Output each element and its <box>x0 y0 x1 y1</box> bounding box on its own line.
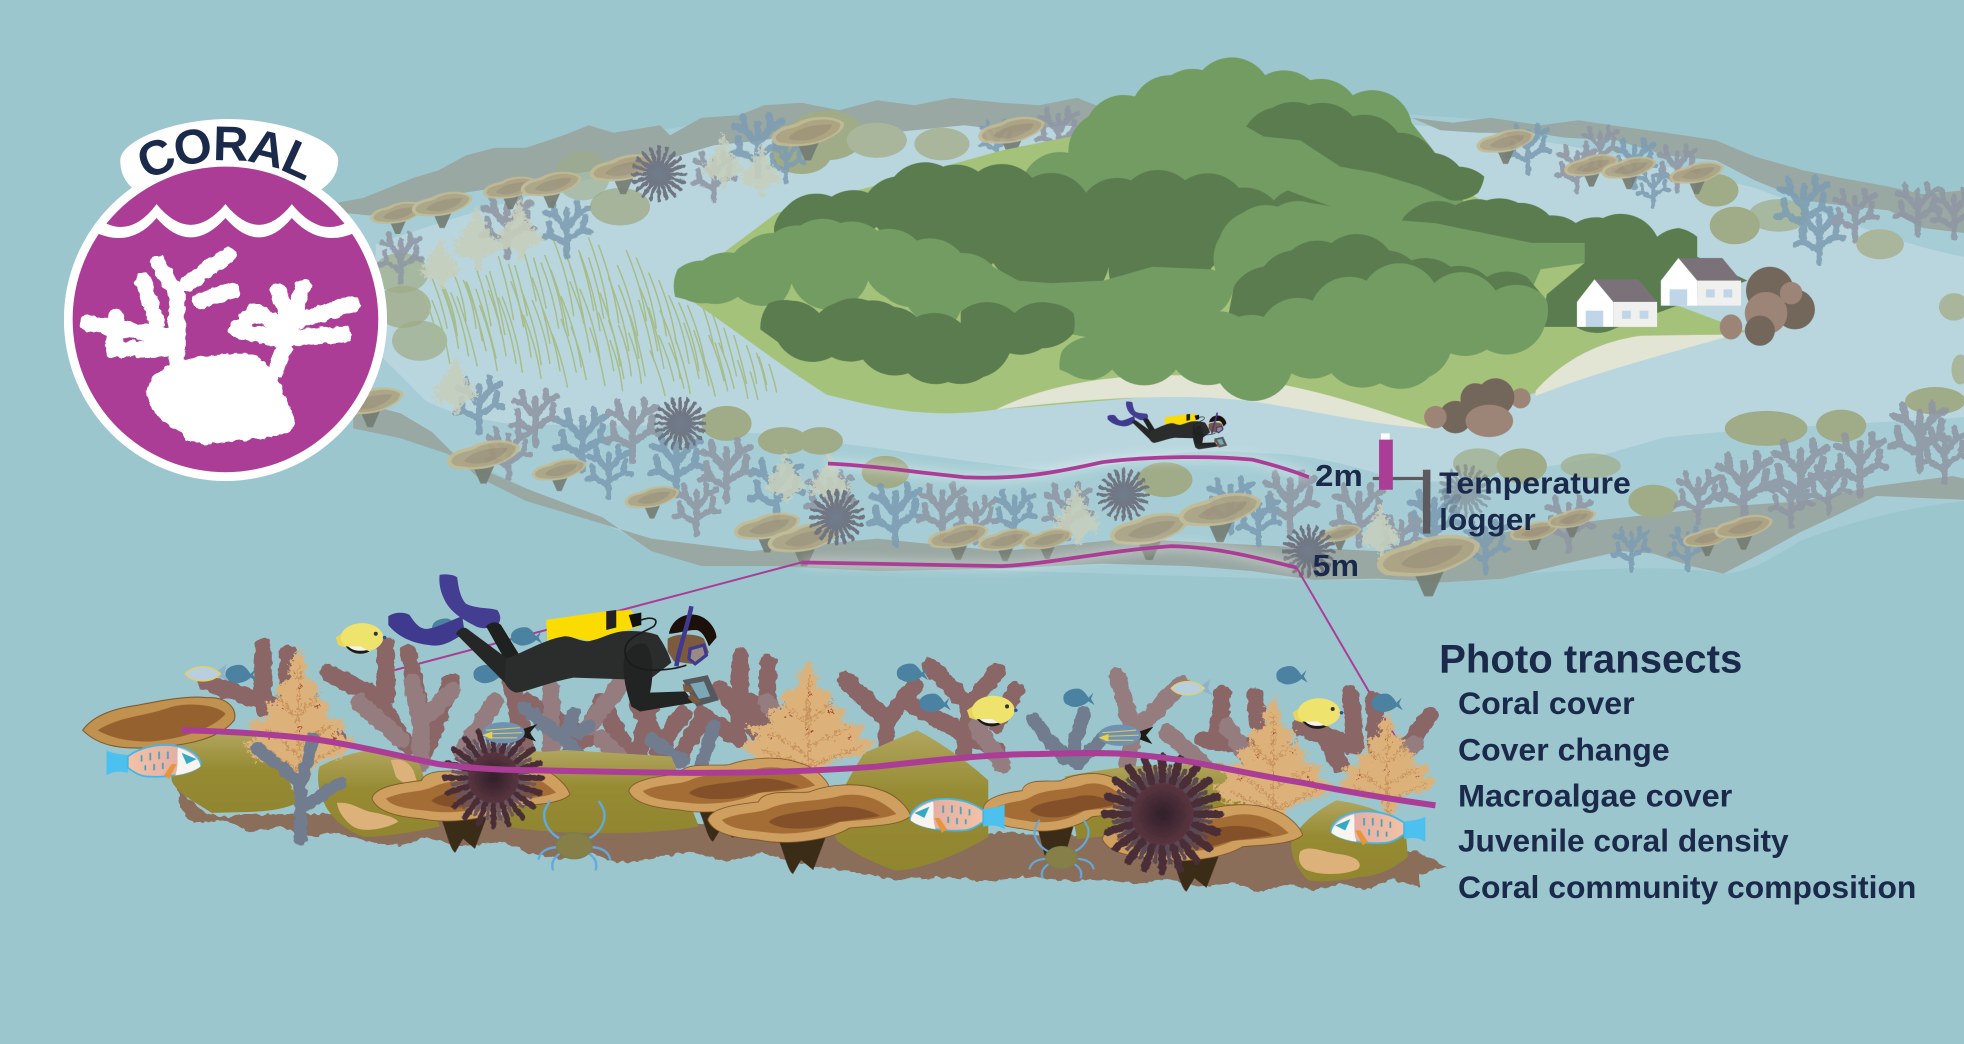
tree canopy: light right band <box>1214 201 1584 301</box>
badge disc <box>64 158 387 481</box>
table coral 3 back <box>629 758 829 842</box>
island <box>674 57 1747 428</box>
tree canopy: dark east band <box>1402 198 1747 333</box>
algae patch 4 <box>834 730 988 871</box>
table coral 2 <box>372 763 570 853</box>
algae patch right <box>1291 800 1408 881</box>
tree canopy: dark central band <box>774 162 1331 323</box>
metric: juvenile coral density: Juvenile coral density <box>1458 824 1789 859</box>
tree canopy: dark lower left <box>760 298 1075 384</box>
algae patch 2 <box>318 750 440 837</box>
algae patch 5 <box>1065 763 1253 839</box>
blue silhouette fish <box>225 619 1403 712</box>
metric: macroalgae cover: Macroalgae cover <box>1458 779 1732 814</box>
large diver with camera <box>388 574 719 711</box>
metric: cover change: Cover change <box>1458 732 1670 767</box>
tree canopy: back light hill <box>1023 57 1478 263</box>
rubble band <box>177 787 1447 892</box>
small diver over reef <box>1108 401 1227 449</box>
bottom reef branching corals <box>455 378 1964 572</box>
striped fish <box>482 722 1154 746</box>
lagoon <box>376 122 1964 482</box>
crab 2 <box>1030 820 1093 878</box>
tree canopy: dark mid band <box>1229 234 1547 328</box>
close-up reef transect scene <box>83 574 1447 892</box>
house: front <box>1577 279 1657 327</box>
crown of thorns starfish on reef <box>633 148 1491 576</box>
table coral far left core <box>98 705 225 742</box>
rocks: south point <box>1424 378 1531 437</box>
crown of thorns starfish 1 <box>445 729 542 827</box>
back branching corals maroon <box>207 646 1429 764</box>
crown of thorns starfish 2 <box>1105 757 1220 872</box>
coral badge: CORAL <box>140 126 307 181</box>
table coral 5 <box>1102 805 1303 892</box>
zoom guide line right <box>1296 567 1397 739</box>
metric: coral cover: Coral cover <box>1458 686 1635 721</box>
yellow fish <box>336 623 1343 729</box>
metric: coral community composition: Coral community composition <box>1458 870 1916 905</box>
zoom guide line left <box>395 562 802 670</box>
top right reef crest rubble <box>1412 118 1964 233</box>
table coral 4 <box>983 773 1139 863</box>
badge label tab <box>120 119 338 190</box>
mid branching corals mauve <box>359 676 1415 783</box>
algae patch left <box>171 733 297 813</box>
table coral far left <box>83 697 235 748</box>
heading: photo transects: Photo transects <box>1439 638 1742 682</box>
foreground blue coral <box>257 739 341 839</box>
macroalgae blobs on reef <box>373 110 1964 517</box>
silver fish <box>185 664 1213 695</box>
reef flat shallow water <box>338 108 1964 580</box>
table coral 3 front <box>708 785 911 874</box>
badge wave <box>96 204 354 238</box>
algae patch 3 <box>496 750 699 833</box>
tree canopy: light left band <box>674 219 1234 342</box>
island grass <box>676 125 1747 428</box>
top reef crest rubble <box>337 98 1109 215</box>
coral badge <box>64 119 387 481</box>
metric list <box>1458 686 1916 905</box>
bottom reef crest rubble <box>353 401 1964 582</box>
temperature logger label: logger <box>1439 502 1536 537</box>
house: rear <box>1661 258 1741 306</box>
crab 1 <box>539 802 610 869</box>
table corals on lower reef <box>337 387 1773 596</box>
temperature logger label: Temperature <box>1439 466 1631 501</box>
tree canopy: dark top ridge <box>1246 102 1484 201</box>
temperature logger icon <box>1373 433 1430 534</box>
table corals on upper reef <box>370 117 1724 234</box>
rocks: east point <box>1720 267 1815 346</box>
2m transect line <box>828 457 1309 478</box>
5m transect line <box>802 546 1296 567</box>
sand patches <box>337 760 1360 874</box>
top reef branching corals <box>380 108 1964 282</box>
faded soft corals on reef <box>420 135 1402 557</box>
soft corals tan <box>245 650 1437 832</box>
seagrass bed <box>423 238 777 400</box>
label 5m: 5m <box>1313 548 1359 583</box>
sand beach south <box>996 375 1434 428</box>
houses <box>1577 258 1741 327</box>
parrotfish <box>106 745 1425 845</box>
label 2m: 2m <box>1315 458 1363 493</box>
blue grey branching corals <box>524 708 1102 764</box>
photo transect line <box>182 730 1435 805</box>
sand beach east <box>1536 334 1735 396</box>
badge coral icon <box>88 256 352 444</box>
tree canopy: light lower band <box>1059 263 1548 401</box>
